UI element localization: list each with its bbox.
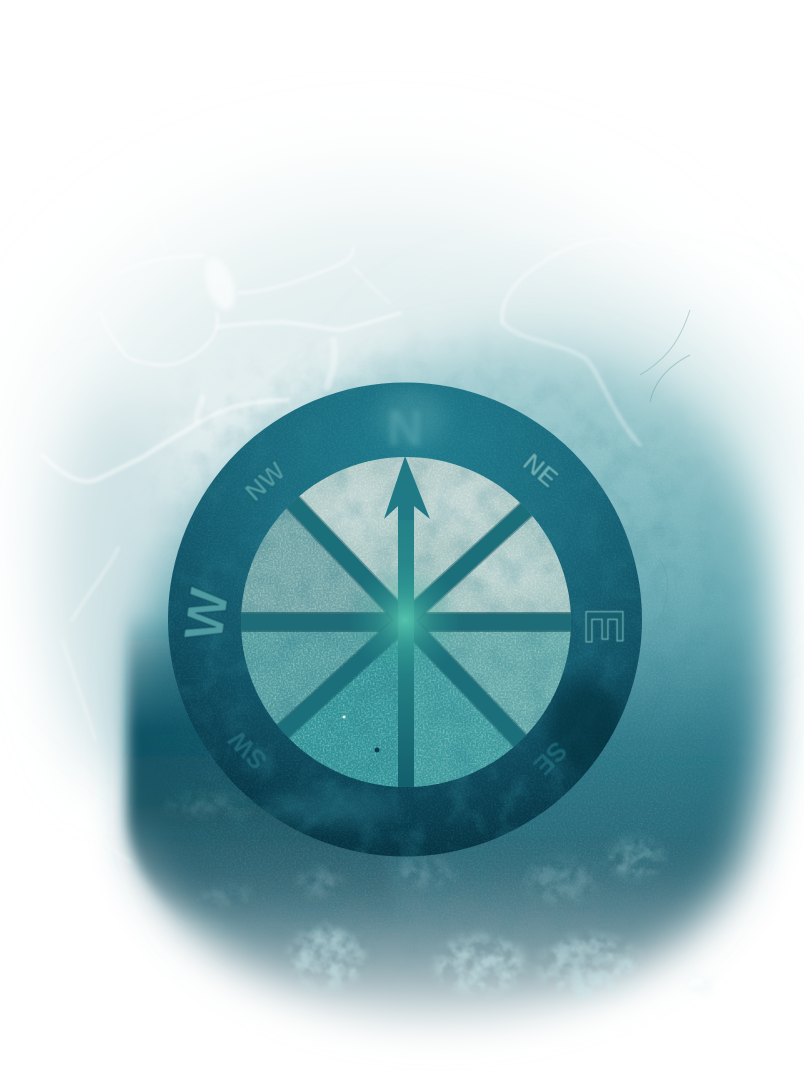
plate grain: [240, 456, 572, 788]
fog: stone streak texture: [167, 359, 727, 934]
fog: dark water lower left: [128, 610, 400, 930]
stone ring: [168, 382, 642, 856]
vein knot: bright tangle: [199, 254, 241, 314]
wedge: west-north-west: [241, 502, 387, 618]
rocks: pale seabed patches: [168, 792, 705, 992]
fog: pale haze above and left of compass: [55, 210, 760, 780]
wedge: south-south-west: [283, 638, 402, 787]
wedge: north-north-west: [292, 457, 405, 601]
letter: NE: NE: [517, 447, 564, 493]
wedge: east-south-east: [427, 627, 571, 740]
ring texture: [168, 382, 642, 857]
compass disc: [168, 382, 642, 857]
letter: N: N: [387, 400, 423, 456]
veins: light caustic lines: [42, 213, 640, 862]
letter: SE: SE: [527, 735, 573, 781]
letter: SW: SW: [222, 725, 273, 776]
plate mottling: [240, 456, 572, 788]
letter: E: E: [574, 608, 634, 644]
plate highlights: [321, 477, 550, 594]
spokes: cross arms: [240, 489, 572, 788]
wedge: south-south-east: [410, 642, 519, 787]
fog: teal body: [140, 348, 771, 1018]
plate specks: [342, 716, 380, 752]
letter: NW: NW: [239, 455, 291, 507]
wedge: east-north-east: [424, 510, 571, 619]
inner plate wedges: [241, 457, 571, 787]
north arrow head: [384, 456, 430, 520]
wedge: west-south-west: [241, 628, 380, 730]
illustration: stone compass in teal fog: [18, 180, 804, 1040]
cracks: fine lines in stone: [640, 310, 690, 640]
wedge: north-north-east: [406, 457, 526, 601]
centre glow: [347, 562, 463, 678]
letter: W: W: [172, 584, 241, 644]
direction letters: [172, 400, 634, 781]
